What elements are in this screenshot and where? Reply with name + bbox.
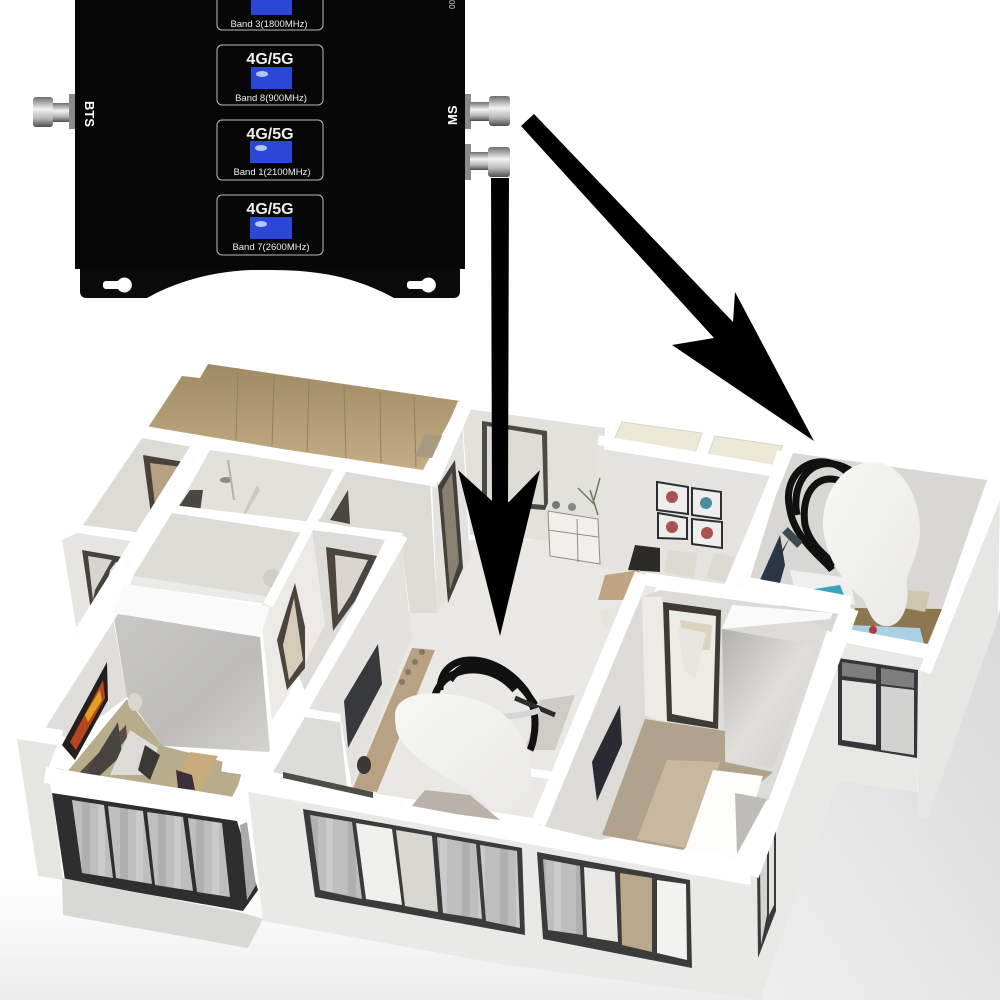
- picture frames: [657, 482, 722, 548]
- BTS connector: [33, 94, 75, 129]
- white wall tops: [35, 404, 1000, 877]
- right room: [740, 453, 987, 648]
- band 7 panel: [217, 195, 323, 255]
- side wall with TV: [305, 534, 435, 792]
- cable connector: [465, 144, 510, 180]
- cream top openings: [612, 422, 783, 466]
- cabinet and vase: [548, 478, 600, 564]
- back room: wood wardrobe wall: [147, 364, 460, 470]
- mounting hole left: [103, 277, 132, 292]
- band 3 panel: [217, 0, 323, 30]
- balcony left outer wall: [17, 739, 63, 880]
- band 8 panel: 4G/5G: [246, 51, 294, 68]
- right outer wall: [837, 490, 1000, 819]
- band 1 panel: 4G/5G: [246, 126, 294, 143]
- MS label: MS: [445, 105, 460, 125]
- balcony bedroom: [37, 530, 325, 801]
- band 3 panel: Band 3(1800MHz): [230, 19, 308, 30]
- band 1 panel: [217, 120, 323, 180]
- antenna: living room: [395, 660, 555, 812]
- model mark: 00: [447, 0, 456, 9]
- mounting bracket: [80, 268, 460, 298]
- small balcony alcove: [273, 711, 373, 798]
- band 1 panel: Band 1(2100MHz): [233, 167, 311, 178]
- band 7 panel: 4G/5G: [246, 201, 294, 218]
- arrow: to living room antenna: [458, 178, 540, 636]
- BTS label: BTS: [82, 101, 97, 127]
- middle room with door: [270, 529, 385, 699]
- band 8 panel: Band 8(900MHz): [235, 93, 307, 104]
- main front wall and windows: [248, 790, 762, 1000]
- band 7 panel: Band 7(2600MHz): [232, 242, 310, 253]
- signal repeater: [33, 0, 510, 298]
- living hall floor: [352, 540, 660, 820]
- living room rug and furniture: [410, 695, 575, 820]
- small back room and door: [315, 420, 470, 613]
- middle bedroom: [538, 590, 833, 858]
- arrow: to right room antenna: [521, 114, 814, 441]
- wall painting: [62, 662, 108, 760]
- antenna: right room: [785, 462, 920, 626]
- right side wall and side window: [750, 610, 847, 1000]
- band 8 panel: [217, 45, 323, 105]
- MS connector: [465, 94, 510, 129]
- balcony base: [62, 878, 263, 948]
- living room back wall: [462, 408, 770, 584]
- bathroom: [130, 450, 340, 604]
- repeater body: [75, 0, 465, 269]
- mounting hole right: [407, 278, 436, 292]
- rear left room with door: [62, 438, 198, 639]
- balcony window: [52, 793, 258, 911]
- dining chairs and table: [598, 545, 735, 630]
